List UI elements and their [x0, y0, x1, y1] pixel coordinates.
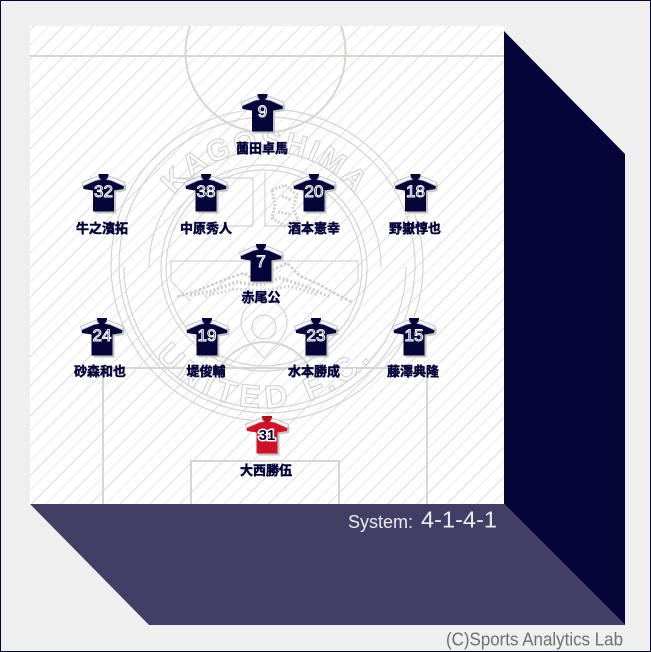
- player 23: 23: [307, 326, 325, 345]
- crest text: UNITED F.C.: UNITED F.C.: [158, 341, 369, 409]
- player 23: [288, 318, 340, 379]
- panel: floor with system label area: [30, 504, 625, 625]
- copyright credit: (C)Sports Analytics Lab: [446, 630, 623, 650]
- panel: pitch: [30, 26, 504, 504]
- goalkeeper 31: 大西勝伍: [240, 463, 292, 478]
- player 9: 9: [258, 102, 267, 121]
- player 38: 中原秀人: [180, 221, 232, 236]
- player 9: [236, 94, 288, 156]
- goalkeeper 31: [240, 416, 292, 478]
- player 20: 酒本憲幸: [288, 221, 340, 236]
- player 18: [389, 174, 441, 236]
- player 7: [240, 244, 284, 305]
- player 24: 24: [93, 326, 111, 345]
- system label: [348, 506, 497, 532]
- player 20: [288, 174, 340, 236]
- player 20: 20: [305, 182, 323, 201]
- player 24: [74, 318, 126, 379]
- player 19: 堤俊輔: [186, 364, 226, 379]
- system label: System:: [348, 512, 413, 532]
- club crest watermark: [111, 109, 423, 421]
- player 32: 32: [94, 182, 113, 201]
- player 9: 薗田卓馬: [236, 141, 288, 156]
- player 18: 野嶽惇也: [389, 221, 441, 236]
- player 15: 15: [405, 326, 423, 345]
- player 7: 赤尾公: [241, 290, 281, 305]
- player 23: 水本勝成: [288, 364, 340, 379]
- player 38: 38: [197, 182, 215, 201]
- player 19: 19: [198, 326, 216, 345]
- player 15: 藤澤典隆: [387, 364, 439, 379]
- player 7: 7: [256, 252, 266, 271]
- player 24: 砂森和也: [74, 364, 126, 379]
- crest text: KAGOSHIMA: KAGOSHIMA: [160, 130, 364, 194]
- player 15: [387, 318, 439, 379]
- player 19: [186, 318, 230, 379]
- player 32: 牛之濱拓: [76, 221, 128, 236]
- panel: right side wall: [504, 31, 625, 625]
- pitch markings: [30, 26, 504, 504]
- goalkeeper 31: 31: [259, 427, 275, 444]
- system label: 4-1-4-1: [421, 506, 497, 532]
- player 32: [76, 174, 128, 236]
- player 18: 18: [406, 182, 425, 201]
- player 38: [180, 174, 232, 236]
